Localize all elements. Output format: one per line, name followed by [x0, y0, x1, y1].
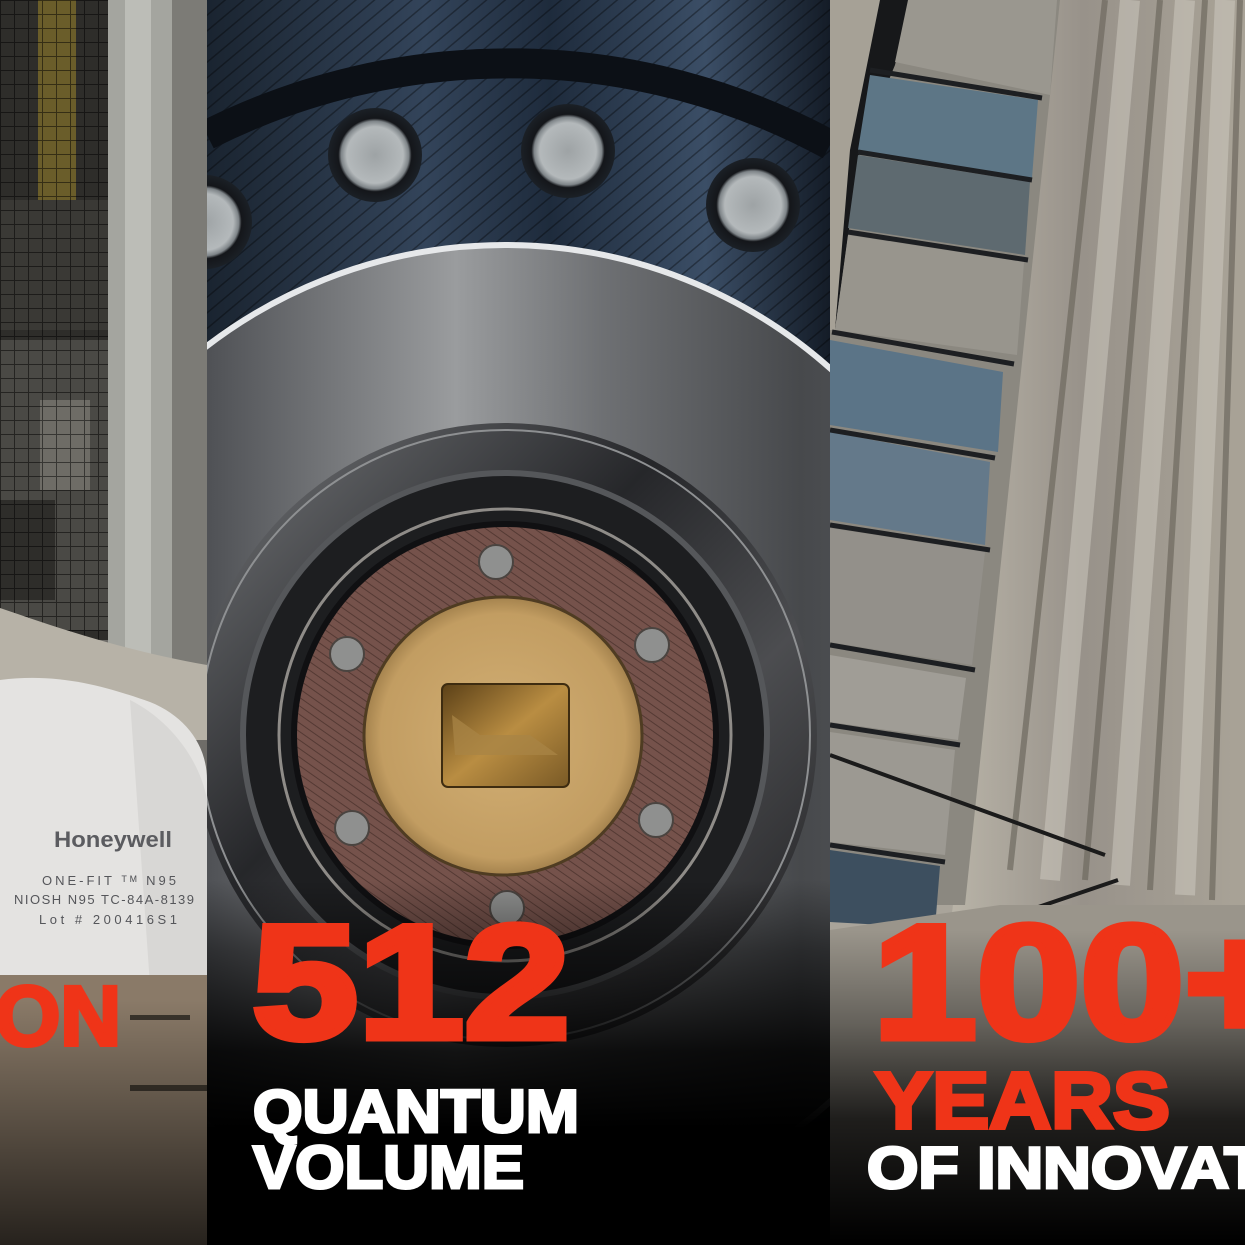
- stat: 512: 512: [252, 892, 570, 1073]
- panel: historic building photo: [830, 0, 1245, 1245]
- panel: protection mask photo: [0, 0, 207, 1245]
- mask print: Honeywell label: NIOSH N95 TC-84A-8139: [14, 892, 194, 907]
- photo: grey frame: [0, 0, 207, 740]
- photo: stone columns: [950, 0, 1245, 930]
- photo: white mask: [0, 678, 207, 985]
- mask print: Honeywell label: [14, 827, 194, 927]
- photo: gold wafer: [364, 597, 642, 875]
- photo: copper plate: [297, 527, 713, 943]
- photo: copper plate screws: [330, 545, 673, 925]
- label: YEARS: YEARS: [875, 1056, 1170, 1145]
- photo: outer black ring: [207, 63, 830, 145]
- label: QUANTUM VOLUME: QUANTUM: [253, 1078, 579, 1145]
- label: QUANTUM VOLUME: [251, 1088, 576, 1190]
- photo: table surface: [0, 975, 207, 1245]
- photo: pavement: [830, 905, 1245, 1049]
- photo: building windows: [830, 0, 1060, 928]
- mask print: Honeywell label: ONE-FIT ᵀᴹ N95: [42, 873, 176, 888]
- photo: bottom fade to black: [207, 880, 830, 1245]
- mask print: Honeywell label: Honeywell: [54, 827, 172, 852]
- photo: inner dark ring: [193, 423, 817, 1047]
- label: QUANTUM VOLUME: VOLUME: [253, 1134, 524, 1201]
- stat: 100+: 100+: [873, 892, 1245, 1073]
- photo: dark mesh background: [0, 0, 108, 640]
- photo: large steel disc: [207, 242, 830, 1102]
- mask print: Honeywell label: Lot # 200416S1: [39, 912, 177, 927]
- photo: bolts: [158, 104, 800, 269]
- panel: quantum computer photo: [207, 0, 830, 1190]
- photo: lamp cable: [830, 755, 1118, 920]
